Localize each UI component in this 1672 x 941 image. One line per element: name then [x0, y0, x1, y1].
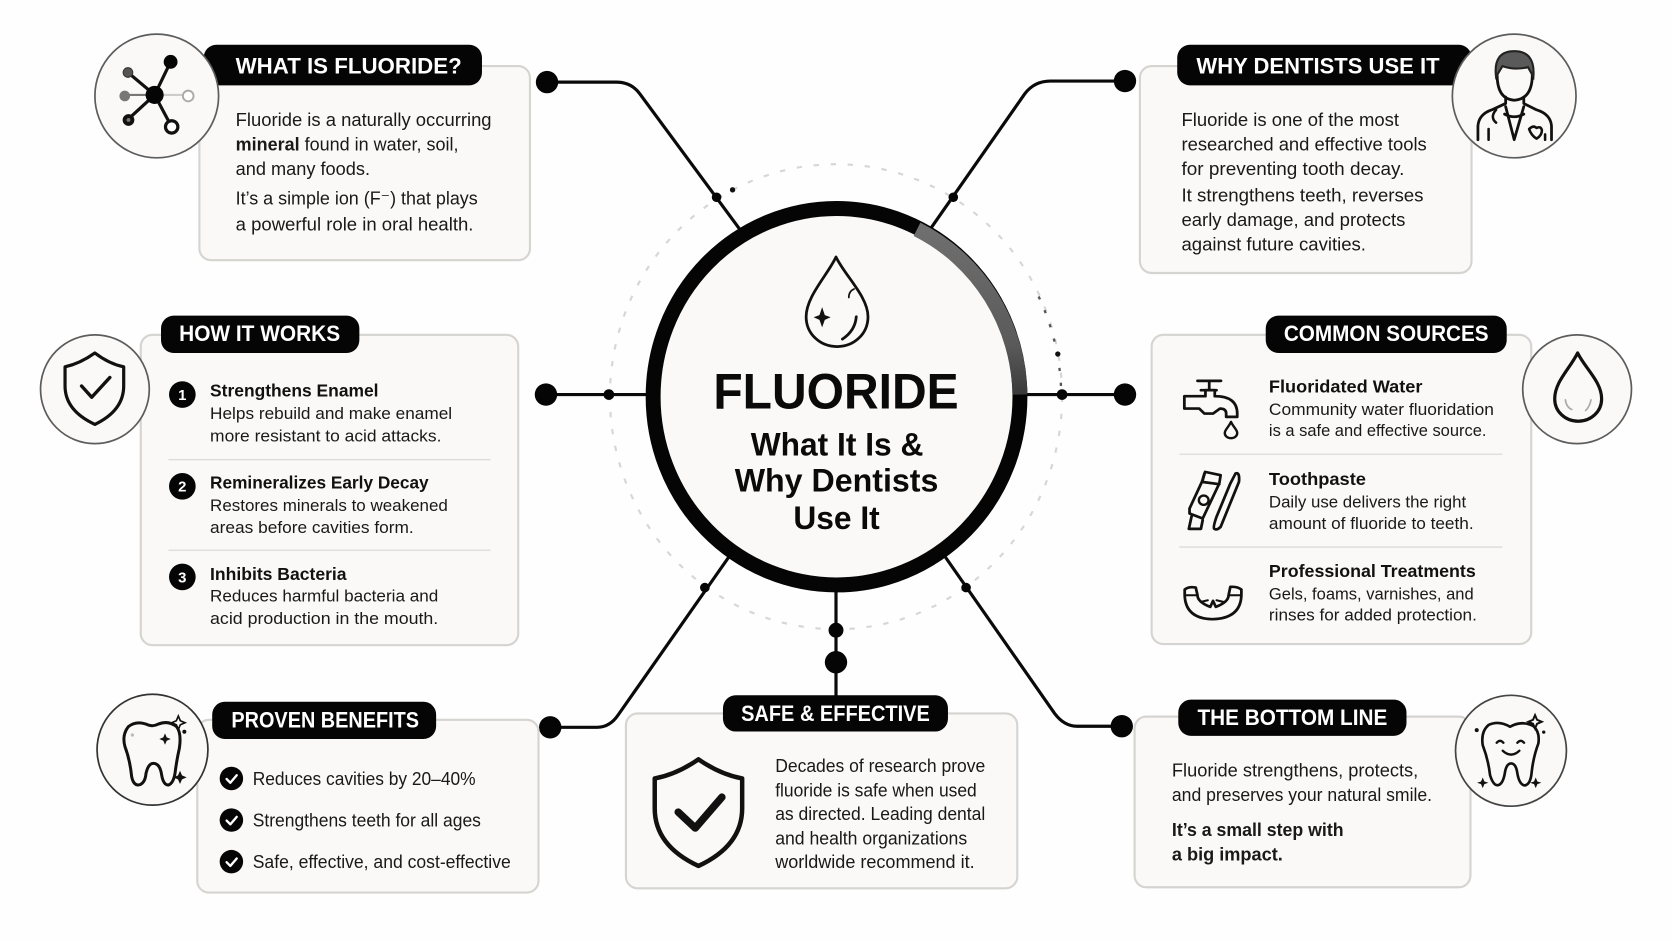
step 2: areas before cavities form. [210, 518, 414, 537]
heading: how it works [161, 316, 359, 353]
subtitle: What It Is & [751, 426, 923, 462]
step 3: acid production in the mouth. [210, 609, 438, 628]
source: toothpaste: Toothpaste [1269, 469, 1366, 489]
text: the bottom line: It’s a small step with [1172, 820, 1344, 840]
step 2: 2 [178, 479, 186, 496]
text: why dentists use it: against future cavities. [1181, 235, 1366, 255]
text: safe and effective: fluoride is safe when used [775, 781, 977, 801]
subtitle: Use It [793, 500, 880, 536]
panel: what is fluoride [95, 34, 530, 260]
heading: how it works: HOW IT WORKS [179, 321, 340, 346]
heading: what is fluoride: WHAT IS FLUORIDE? [236, 54, 462, 79]
icon: molecule [95, 34, 219, 158]
text: what is fluoride: a powerful role in oral health. [236, 214, 473, 234]
source: toothpaste [1269, 469, 1474, 533]
heading: why dentists use it: WHY DENTISTS USE IT [1196, 54, 1440, 79]
source: professional treatments: Professional Treatments [1269, 561, 1476, 581]
connector: what is fluoride [536, 71, 739, 228]
text: the bottom line: a big impact. [1172, 845, 1283, 865]
text: why dentists use it: researched and effective tools [1181, 134, 1427, 154]
step 2: Remineralizes Early Decay [210, 472, 429, 492]
text: why dentists use it: for preventing tooth decay. [1181, 159, 1404, 179]
icon: fluoride trays [1185, 587, 1241, 619]
text: the bottom line: and preserves your natural smile. [1172, 785, 1432, 805]
text: what is fluoride: and many foods. [236, 159, 370, 179]
text: why dentists use it [1181, 110, 1427, 255]
connector: why dentists use it [931, 70, 1136, 228]
benefit 1: Reduces cavities by 20–40% [253, 769, 476, 789]
benefit 3: Safe, effective, and cost-effective [253, 852, 511, 872]
connector: common sources [1022, 383, 1136, 406]
text: why dentists use it: Fluoride is one of the most [1181, 110, 1399, 130]
text: what is fluoride [236, 110, 492, 234]
text: safe and effective: as directed. Leading dental [775, 804, 985, 824]
text: what is fluoride: It’s a simple ion (F⁻) that plays [236, 189, 478, 209]
source: fluoridated water: Fluoridated Water [1269, 376, 1423, 396]
source: fluoridated water: Community water fluoridation [1269, 400, 1494, 419]
step 3 [169, 564, 438, 628]
source: professional treatments: rinses for added protection. [1269, 606, 1477, 625]
icon: shield check badge [41, 335, 149, 444]
icon: toothpaste and brush [1189, 472, 1239, 529]
subtitle: Why Dentists [735, 463, 938, 499]
step 2: Restores minerals to weakened [210, 496, 448, 515]
panel: proven benefits [97, 694, 538, 893]
connector: safe and effective [825, 589, 847, 704]
icon: dentist [1452, 34, 1576, 158]
text: the bottom line [1172, 760, 1432, 865]
heading: safe and effective [723, 695, 948, 732]
benefit 2: Strengthens teeth for all ages [253, 810, 481, 830]
text: what is fluoride: mineral found in water, soil, [236, 134, 459, 154]
icon: faucet [1184, 381, 1237, 438]
step 3: 3 [178, 569, 186, 586]
subtitle [735, 426, 938, 536]
icon: water drop badge [1523, 335, 1631, 444]
text: safe and effective: and health organizations [775, 829, 967, 849]
connector: how it works [535, 383, 650, 406]
heading: what is fluoride [204, 45, 482, 85]
text: safe and effective: worldwide recommend it. [774, 852, 975, 872]
step 1: Strengthens Enamel [210, 381, 379, 401]
step 3: Inhibits Bacteria [210, 564, 347, 584]
dotted orbit ring [610, 164, 1062, 629]
step 1: more resistant to acid attacks. [210, 426, 441, 445]
icon: smiling tooth [1456, 695, 1566, 806]
heading: proven benefits [212, 702, 436, 739]
text: why dentists use it: early damage, and protects [1181, 210, 1405, 230]
icon: sparkling tooth [97, 694, 208, 805]
source: fluoridated water: is a safe and effective source. [1269, 421, 1486, 440]
heading: why dentists use it [1177, 45, 1472, 85]
source: toothpaste: amount of fluoride to teeth. [1269, 514, 1474, 533]
heading: safe and effective: SAFE & EFFECTIVE [741, 701, 930, 726]
source: toothpaste: Daily use delivers the right [1269, 493, 1466, 512]
title: FLUORIDE [713, 363, 959, 419]
text: why dentists use it: It strengthens teeth, reverses [1181, 186, 1424, 206]
step 2 [169, 472, 448, 537]
text: the bottom line: Fluoride strengthens, protects, [1172, 760, 1418, 780]
source: fluoridated water [1269, 376, 1494, 440]
source: professional treatments: Gels, foams, varnishes, and [1269, 584, 1474, 603]
heading: common sources: COMMON SOURCES [1284, 321, 1489, 346]
panel: the bottom line [1135, 695, 1566, 887]
source: professional treatments [1269, 561, 1477, 625]
step 3: Reduces harmful bacteria and [210, 586, 438, 605]
heading: proven benefits: PROVEN BENEFITS [231, 707, 419, 732]
heading: the bottom line: THE BOTTOM LINE [1197, 705, 1387, 730]
panel: safe and effective [626, 695, 1017, 888]
connector: proven benefits [539, 558, 728, 738]
panel: how it works [41, 316, 518, 645]
step 1: Helps rebuild and make enamel [210, 404, 452, 423]
text: safe and effective: Decades of research prove [775, 756, 985, 776]
step 1 [169, 381, 452, 445]
panel: why dentists use it [1140, 34, 1576, 273]
panel: common sources [1152, 316, 1631, 644]
text: safe and effective [774, 756, 985, 872]
icon: large shield check [655, 759, 742, 866]
text: what is fluoride: Fluoride is a naturally occurring [236, 110, 492, 130]
connector: the bottom line [946, 558, 1133, 737]
step 1: 1 [178, 387, 186, 404]
heading: common sources [1266, 316, 1507, 353]
icon: water drop [806, 257, 868, 347]
heading: the bottom line [1178, 700, 1406, 736]
central hub [653, 208, 1020, 585]
